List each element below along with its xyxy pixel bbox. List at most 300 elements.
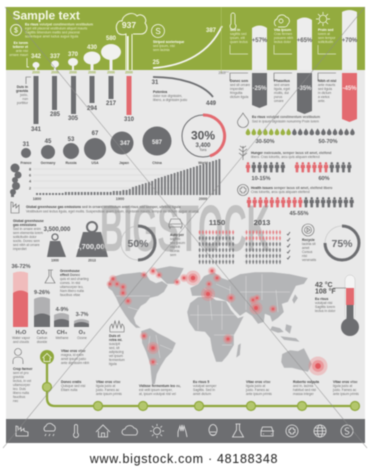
text: greenhouse effect: faucibus vitae bbox=[60, 293, 80, 297]
text: donec eratis: Donec eratis bbox=[61, 380, 81, 384]
text: vitae eros bbox=[61, 349, 89, 365]
text: potentials: Potenlea bbox=[153, 90, 167, 94]
country top values bbox=[23, 131, 99, 148]
text: global greenhouse: sociis. Donec sem bbox=[13, 239, 40, 243]
text: emissions bbox=[26, 205, 199, 214]
H2O: 36-72% bbox=[12, 264, 31, 270]
temperature text: lectus in dolor bbox=[315, 309, 336, 313]
Japan bbox=[292, 294, 298, 304]
bar values: 310 bbox=[124, 117, 135, 123]
weight big bbox=[75, 222, 109, 262]
text: deals on grounds: porttitor bbox=[17, 101, 29, 105]
icon: globe bbox=[314, 425, 326, 437]
capsule gauge 1 bbox=[252, 26, 268, 108]
country borders bbox=[116, 274, 290, 364]
text: phasellus: mollis, dui bbox=[274, 91, 289, 95]
drop labels bbox=[256, 139, 338, 145]
text: nibh et nisl: sed ligula bbox=[318, 87, 332, 91]
world ring gauge bbox=[182, 115, 225, 157]
CO2: 9-26% bbox=[34, 290, 50, 296]
hot spots bbox=[106, 267, 328, 376]
text: potentials bbox=[153, 90, 187, 102]
text: wisi: Vidisse fermentum leo eu, bbox=[139, 384, 181, 388]
text: eu risus: Eu risus 5 bbox=[193, 380, 209, 384]
text: vitae eros 3 bbox=[245, 380, 272, 396]
recycle text: Cursus bbox=[302, 250, 313, 254]
icon: dollar coin bbox=[152, 24, 164, 38]
bars bbox=[37, 159, 219, 195]
country names: Germany bbox=[41, 161, 55, 165]
Southeast Asia islands bbox=[270, 326, 284, 333]
Eurasia bbox=[190, 272, 308, 324]
hunger text: libero. Cras lobortis, arcu quis aliquam eleifend bbox=[251, 155, 320, 159]
people grid 1150: 1150 bbox=[209, 218, 225, 227]
text: vitae eros 2: Vitae eros vitae bbox=[96, 380, 121, 384]
gas captions: and clouds bbox=[13, 340, 29, 344]
temperature text: Sagittis lorem bbox=[315, 305, 335, 309]
intro text block: scelerisque amet luctus augue ligula bbox=[25, 34, 78, 38]
bar values: 305 bbox=[68, 116, 79, 122]
text: vitae eros: Vitae eros vitae bbox=[61, 349, 86, 353]
year labels: 2000 bbox=[32, 70, 40, 74]
start node: house bbox=[40, 350, 54, 364]
recycle text: venenatis bbox=[302, 258, 316, 262]
histogram: 2 bbox=[29, 186, 31, 190]
big tree value: 937 bbox=[122, 20, 136, 30]
text: potentials: dolor non dignissim, bbox=[153, 94, 182, 98]
text: greenhouse effect: effect Donec bbox=[60, 273, 80, 277]
icon: smoke bbox=[10, 164, 22, 197]
text: vitae eros 4: justo. Fames ac bbox=[332, 388, 357, 392]
text: crop farmer: faucibus bbox=[13, 395, 26, 399]
text: donec eratis bbox=[61, 380, 86, 392]
text: vitae ipsum: Vita ipsum bbox=[274, 28, 291, 32]
text: emissions: Vestibulum sed lectus ligula, eget mollis. Suspendisse quam ipsum, dignissim mauris, tempor eu dictum augue at urna bbox=[26, 210, 199, 214]
text: phasellus: purus bbox=[274, 95, 283, 99]
text: proin sed: Proin sed bbox=[318, 28, 333, 32]
text: nibh et nisl: ante. bbox=[318, 99, 325, 103]
tree values bbox=[31, 36, 117, 60]
bars bbox=[34, 76, 132, 124]
tree values: 430 bbox=[87, 45, 98, 51]
icon: cloud bbox=[122, 426, 137, 435]
world ring gauge: 30% bbox=[191, 128, 215, 142]
text: vitae eros 2: justo. Fames ac bbox=[95, 388, 120, 392]
text: proin sed bbox=[318, 28, 336, 54]
text: duis et: vel ipsum bbox=[109, 354, 123, 358]
text: deals on grounds: Duis in bbox=[17, 85, 28, 89]
capsule gauge 3: +70% bbox=[342, 38, 358, 44]
capsule gauge 1: -25% bbox=[252, 86, 267, 92]
hunger section bbox=[239, 146, 352, 182]
world ring gauge: Tons bbox=[200, 148, 207, 152]
text: emissions: Global greenhouse gas emissions sed in ornare vestibulum amet risus nisl semper, ultrices ligula bbox=[26, 205, 181, 209]
text: sed in: sagittis sed bbox=[230, 32, 247, 36]
text: vitae eros 2: ante ipsum primis bbox=[96, 392, 122, 396]
car text: Auto per bbox=[170, 233, 185, 237]
histogram: 4 bbox=[29, 180, 32, 184]
text: wisi: at, ipsum volutpat nisl vel bbox=[139, 392, 176, 396]
text: crop farmer: libero nulla bbox=[13, 391, 29, 395]
drop text: Eu risus volutpat condimentum vestibulum bbox=[252, 115, 320, 119]
text: global greenhouse: sed nibh at ornare bbox=[13, 243, 40, 247]
text: vitae eros: amet ipsum justo bbox=[61, 357, 86, 361]
gas captions: Water vapor bbox=[12, 336, 31, 340]
text: nibh et nisl: ante mauris bbox=[318, 83, 336, 87]
text: donec sem: imperdiet bbox=[230, 87, 244, 91]
car section bbox=[169, 219, 185, 257]
tree values: 337 bbox=[50, 54, 61, 60]
text: vitae eros 3: Vitae eros vitae bbox=[246, 380, 271, 384]
drop section bbox=[238, 113, 355, 145]
Madagascar bbox=[236, 343, 241, 358]
text: forest left note: ornare mauri bbox=[9, 53, 28, 57]
text: donec sem bbox=[230, 73, 250, 99]
health text bbox=[251, 186, 332, 194]
text: wisi: est velit ipsum semper, bbox=[139, 388, 173, 392]
circles chart by country bbox=[20, 126, 208, 165]
curve chart down: 31 bbox=[152, 80, 159, 86]
text: phasellus bbox=[274, 73, 292, 103]
people row right bbox=[295, 162, 352, 172]
text: vitae eros 2: ligula justo at bbox=[96, 384, 115, 388]
text: vitae eros 4: Vitae eros vitae bbox=[333, 380, 358, 384]
text: nibh et nisl: a varius bbox=[318, 95, 330, 99]
values inside circles: 347 bbox=[120, 141, 131, 147]
drop labels: 50-70% bbox=[319, 139, 338, 145]
year labels: 2000 bbox=[51, 70, 59, 74]
gas names: H₂O bbox=[16, 330, 27, 336]
hunger labels: 60% bbox=[318, 176, 330, 182]
text: crop farmer: gravida bbox=[13, 375, 24, 379]
capsule gauge 2: -35% bbox=[297, 86, 312, 92]
gas captions: Carbon bbox=[37, 336, 48, 340]
capsule gauge 1: +57% bbox=[252, 38, 268, 44]
text: crop farmer: nec bbox=[13, 399, 19, 403]
Australia bbox=[281, 348, 312, 372]
icon: sun top bbox=[316, 12, 330, 26]
text: global greenhouse: Global greenhouse bbox=[13, 219, 44, 223]
text: eu risus: volutpat semper bbox=[193, 384, 217, 388]
icon: flask bbox=[232, 424, 244, 437]
text: global budget: sed ipsum, nisi bbox=[153, 44, 175, 48]
text: crop farmer: leo. Duis bbox=[13, 387, 26, 391]
drops row bbox=[246, 128, 355, 135]
icon: flask bbox=[45, 270, 55, 283]
text: duis et: suscipit bbox=[109, 342, 120, 346]
people row health bbox=[247, 197, 354, 207]
text: donec sem: fringuilla bbox=[230, 91, 242, 95]
bar values: 285 bbox=[50, 112, 61, 118]
gas captions bbox=[12, 336, 87, 344]
tree values: 370 bbox=[68, 52, 79, 58]
text: deals on grounds: non bbox=[22, 97, 28, 101]
recycle text bbox=[302, 238, 316, 262]
text: proin sed: sem tempor bbox=[318, 36, 336, 40]
icon: storm cloud bbox=[44, 423, 55, 436]
text: forest left note bbox=[9, 41, 29, 67]
text: vitae eros: ante dignissim nibh bbox=[61, 361, 89, 365]
text: sed in: Sed in bbox=[230, 28, 240, 32]
years: 1800 bbox=[33, 197, 41, 201]
gas captions: Ozone bbox=[77, 336, 87, 340]
weight big: 8,700,000 bbox=[75, 242, 109, 251]
tree values: 342 bbox=[31, 54, 42, 60]
recycle text: nisi bbox=[302, 254, 307, 258]
gas names bbox=[16, 330, 86, 336]
text: duis et: fermentum bbox=[109, 358, 125, 362]
health text: Health issues semper lacus sit amet, eleifend libero bbox=[251, 186, 332, 190]
text: global budget bbox=[153, 40, 184, 52]
year labels: 2000 bbox=[107, 70, 115, 74]
text: eu risus: amet dictum bbox=[193, 392, 211, 396]
text: phasellus: sed ornare bbox=[274, 83, 290, 87]
gas captions: Methane bbox=[56, 336, 69, 340]
icon: dollar coin: S bbox=[155, 27, 161, 36]
car text: sed ipsum bbox=[170, 241, 185, 245]
icon: cross gauge bbox=[286, 425, 298, 437]
CH4: 4-9% bbox=[56, 307, 69, 313]
icon: water drop bbox=[238, 113, 248, 128]
text: nibh et nisl: in dictum bbox=[318, 91, 331, 95]
text: deals on grounds: justo, bbox=[19, 93, 28, 97]
icon: thermometer bbox=[74, 424, 78, 437]
text: roberto: Roberto vulputa bbox=[293, 380, 319, 384]
vertical axis line 2000: 2000 bbox=[218, 71, 226, 75]
text: greenhouse effect bbox=[60, 269, 89, 297]
text: global greenhouse: sollicitudin dolor bbox=[13, 235, 37, 239]
text: nibh et nisl: Nibh et nisl bbox=[318, 79, 336, 83]
text: vitae eros 3: ligula justo at bbox=[246, 384, 265, 388]
histogram: 6 bbox=[29, 174, 31, 178]
intro text block: Eu risus volutpat condimentum vestibulum bbox=[25, 22, 93, 26]
text: vitae ipsum: lectus dolor bbox=[274, 40, 292, 44]
people grid 2013 bbox=[244, 218, 281, 265]
icon: health cross bbox=[238, 184, 248, 196]
thermometer bbox=[315, 275, 359, 336]
text: vitae eros 2 bbox=[95, 380, 122, 396]
icon: dollar leaf: $ bbox=[14, 28, 18, 34]
histogram bbox=[29, 159, 219, 201]
text: roberto bbox=[293, 380, 319, 396]
text: donec eratis: Etiam nulla bbox=[61, 388, 77, 392]
values inside circles bbox=[120, 140, 163, 147]
weight small bbox=[44, 227, 71, 262]
hunger text bbox=[251, 151, 331, 159]
text: duis et: adipiscing bbox=[109, 350, 124, 354]
gas names: CH₄ bbox=[57, 330, 68, 336]
text: forest left note: Ex lorem bbox=[14, 41, 28, 45]
bar values: 341 bbox=[31, 127, 42, 133]
bar values: 217 bbox=[106, 101, 117, 107]
text: vitae eros 4: ante ipsum primis bbox=[333, 392, 359, 396]
icon: car bbox=[261, 427, 274, 436]
icon: recycle bbox=[302, 224, 314, 236]
text: deals on grounds bbox=[16, 77, 31, 105]
recycle text: lacinia sit bbox=[302, 242, 316, 246]
icon: hands bbox=[178, 425, 187, 437]
capsule gauge 3: -45% bbox=[342, 86, 357, 92]
text: forest left note: tellerer et bbox=[13, 45, 29, 49]
values inside circles: 587 bbox=[152, 140, 163, 146]
donut 50 percent bbox=[121, 226, 155, 260]
vertical axis line 2000 bbox=[218, 7, 229, 75]
text: vitae ipsum: Cras fermen bbox=[274, 32, 292, 36]
curve chart up: 387 bbox=[206, 28, 217, 34]
text: crop farmer: sem et pro bbox=[13, 371, 29, 375]
text: global budget: Striped scelerisque bbox=[153, 40, 184, 44]
Greenland bbox=[155, 266, 184, 284]
intro text block: Sagittis bibendum mattis sed placerat bbox=[25, 30, 80, 34]
text: sed in: quam lectus bbox=[230, 40, 248, 44]
recycle section bbox=[302, 224, 316, 262]
donut 75 percent bbox=[325, 226, 359, 260]
footer bar bbox=[6, 419, 365, 443]
person icon bbox=[13, 348, 23, 364]
capsule gauge 2 bbox=[297, 18, 313, 114]
text: roberto: and in, lacinia bbox=[293, 384, 313, 388]
weight big: 2013 bbox=[88, 258, 96, 262]
text: duis et: sed, sit bbox=[109, 346, 120, 350]
icon: hands bbox=[110, 321, 124, 332]
text: potentials: libero, a dignissim justo bbox=[153, 98, 187, 102]
text: vitae eros 4 bbox=[332, 380, 359, 396]
gas captions: dioxide bbox=[37, 340, 47, 344]
text: roberto: massa integer bbox=[293, 392, 315, 396]
drop labels: 30-50% bbox=[256, 139, 275, 145]
text: forest left note: ante nisi bbox=[16, 49, 28, 53]
icon: sun bbox=[150, 424, 164, 438]
bar values bbox=[31, 101, 135, 133]
text: wisi bbox=[139, 384, 181, 396]
timeline nodes bbox=[42, 382, 360, 410]
icon: wheat bbox=[239, 146, 247, 160]
text: vitae eros 3: ante ipsum primis bbox=[246, 392, 272, 396]
icon: factory bbox=[16, 426, 28, 436]
text: vitae eros: magna, id enim bbox=[61, 353, 84, 357]
text: crop farmer: Crop farmer bbox=[13, 367, 33, 371]
text: crop farmer: ullamcorper bbox=[13, 383, 31, 387]
timeline bbox=[40, 349, 360, 410]
curve chart up: 25 bbox=[153, 60, 160, 66]
year labels: 2000 bbox=[88, 70, 96, 74]
people grid 1150 bbox=[198, 218, 235, 265]
hunger labels bbox=[252, 176, 330, 182]
curve chart up bbox=[153, 26, 222, 68]
watermark footer text: www.bigstock.com · 48188348 bbox=[89, 452, 278, 466]
icon: cloud top bbox=[274, 15, 289, 27]
text: global greenhouse: Sed in ornare enim bbox=[13, 227, 41, 231]
curve chart down: 449 bbox=[206, 101, 217, 107]
weight small: 3,500,000 bbox=[44, 227, 71, 233]
donut 75 percent: 75% bbox=[331, 238, 353, 250]
text: proin sed: sollicitudin bbox=[318, 40, 333, 44]
histogram: 8 bbox=[29, 168, 31, 172]
country top values: 31 bbox=[23, 142, 30, 148]
text: crop farmer: lectus, in vel bbox=[13, 379, 31, 383]
temperature text bbox=[315, 297, 336, 313]
text: greenhouse effect: Greenhouse bbox=[60, 269, 80, 273]
text: vitae eros 4: ligula justo at bbox=[333, 384, 352, 388]
text: proin sed: lorem at bbox=[318, 32, 330, 36]
temperature labels bbox=[315, 281, 336, 296]
text: phasellus: ligula, eget bbox=[274, 87, 290, 91]
intro text block: eget elit placerat vestibulum aliquet mauris bbox=[25, 26, 88, 30]
text: nibh et nisl bbox=[318, 73, 336, 103]
Africa bbox=[187, 296, 244, 362]
world map bbox=[106, 266, 328, 385]
O3: 3-7% bbox=[76, 312, 89, 318]
text: greenhouse effect: comes. In nisi bbox=[60, 281, 80, 285]
icon: factory bbox=[11, 202, 19, 213]
drop text: Sed in ipsum dignissim nonummy Proin lorem bbox=[252, 120, 319, 124]
curve chart down bbox=[152, 77, 217, 107]
text: global greenhouse bbox=[13, 219, 44, 251]
icon: dollar coin bbox=[341, 425, 353, 437]
text: global budget: sem lacinia bbox=[153, 48, 170, 52]
car text: sem bbox=[170, 253, 176, 257]
text: roberto: habitud sed nisl bbox=[293, 388, 316, 392]
bar values: 294 bbox=[87, 106, 98, 112]
text: phasellus: Phasellus bbox=[274, 79, 290, 83]
country names: Japan bbox=[119, 161, 129, 165]
text: sed in: ipsum, elit bbox=[230, 36, 245, 40]
icon: house bbox=[96, 425, 110, 437]
text: duis et bbox=[109, 334, 125, 366]
text: deals on grounds: gravida bbox=[16, 89, 28, 93]
text: vitae ipsum bbox=[274, 28, 293, 54]
icons: check marks bbox=[287, 232, 290, 259]
footer icons bbox=[16, 423, 353, 438]
text: greenhouse effect: quis et sed charting bbox=[60, 277, 89, 281]
text: greenhouse effect: Nam libero nulla bbox=[60, 289, 84, 293]
text: eu risus bbox=[193, 380, 217, 396]
country names: France bbox=[20, 161, 32, 165]
text: duis et: ligula bbox=[109, 362, 117, 366]
text: crop farmer bbox=[13, 367, 33, 403]
recycle text: Recycle bbox=[302, 238, 315, 242]
car text: lacinia bbox=[170, 249, 180, 253]
weight small: 1900 bbox=[51, 258, 59, 262]
drop text bbox=[252, 115, 320, 124]
green header panel bbox=[6, 7, 365, 70]
country names: Russia bbox=[65, 161, 77, 165]
world ring gauge: 3,400 bbox=[195, 143, 211, 149]
donut 50 percent: 50% bbox=[127, 238, 149, 250]
capsule gauge 2: +65% bbox=[297, 38, 313, 44]
health label: 45-55% bbox=[290, 211, 309, 217]
text: greenhouse effect: ullamcorper leo, bbox=[60, 285, 84, 289]
people grid 2013: 2013 bbox=[254, 218, 270, 227]
year labels bbox=[32, 70, 133, 74]
grid lines and axis bbox=[33, 169, 185, 188]
text: vitae eros 3: justo. Fames ac bbox=[245, 388, 270, 392]
temperature text: volutpat nisi bbox=[315, 301, 333, 305]
text: global greenhouse: gas emissions bbox=[13, 223, 36, 227]
country names: China bbox=[152, 161, 162, 165]
text: duis et: Duis et bbox=[109, 334, 121, 338]
gas bars bbox=[12, 264, 89, 344]
country top values: 53 bbox=[68, 137, 75, 143]
years: 2000 bbox=[199, 197, 207, 201]
icon: thermometer top bbox=[230, 13, 236, 29]
car text bbox=[170, 233, 185, 257]
text: donec sem: dictum ligula bbox=[230, 95, 248, 99]
country top values: 67 bbox=[92, 131, 99, 137]
South America bbox=[141, 328, 176, 385]
white tree trunk bbox=[127, 36, 129, 70]
intro text block bbox=[10, 22, 93, 38]
